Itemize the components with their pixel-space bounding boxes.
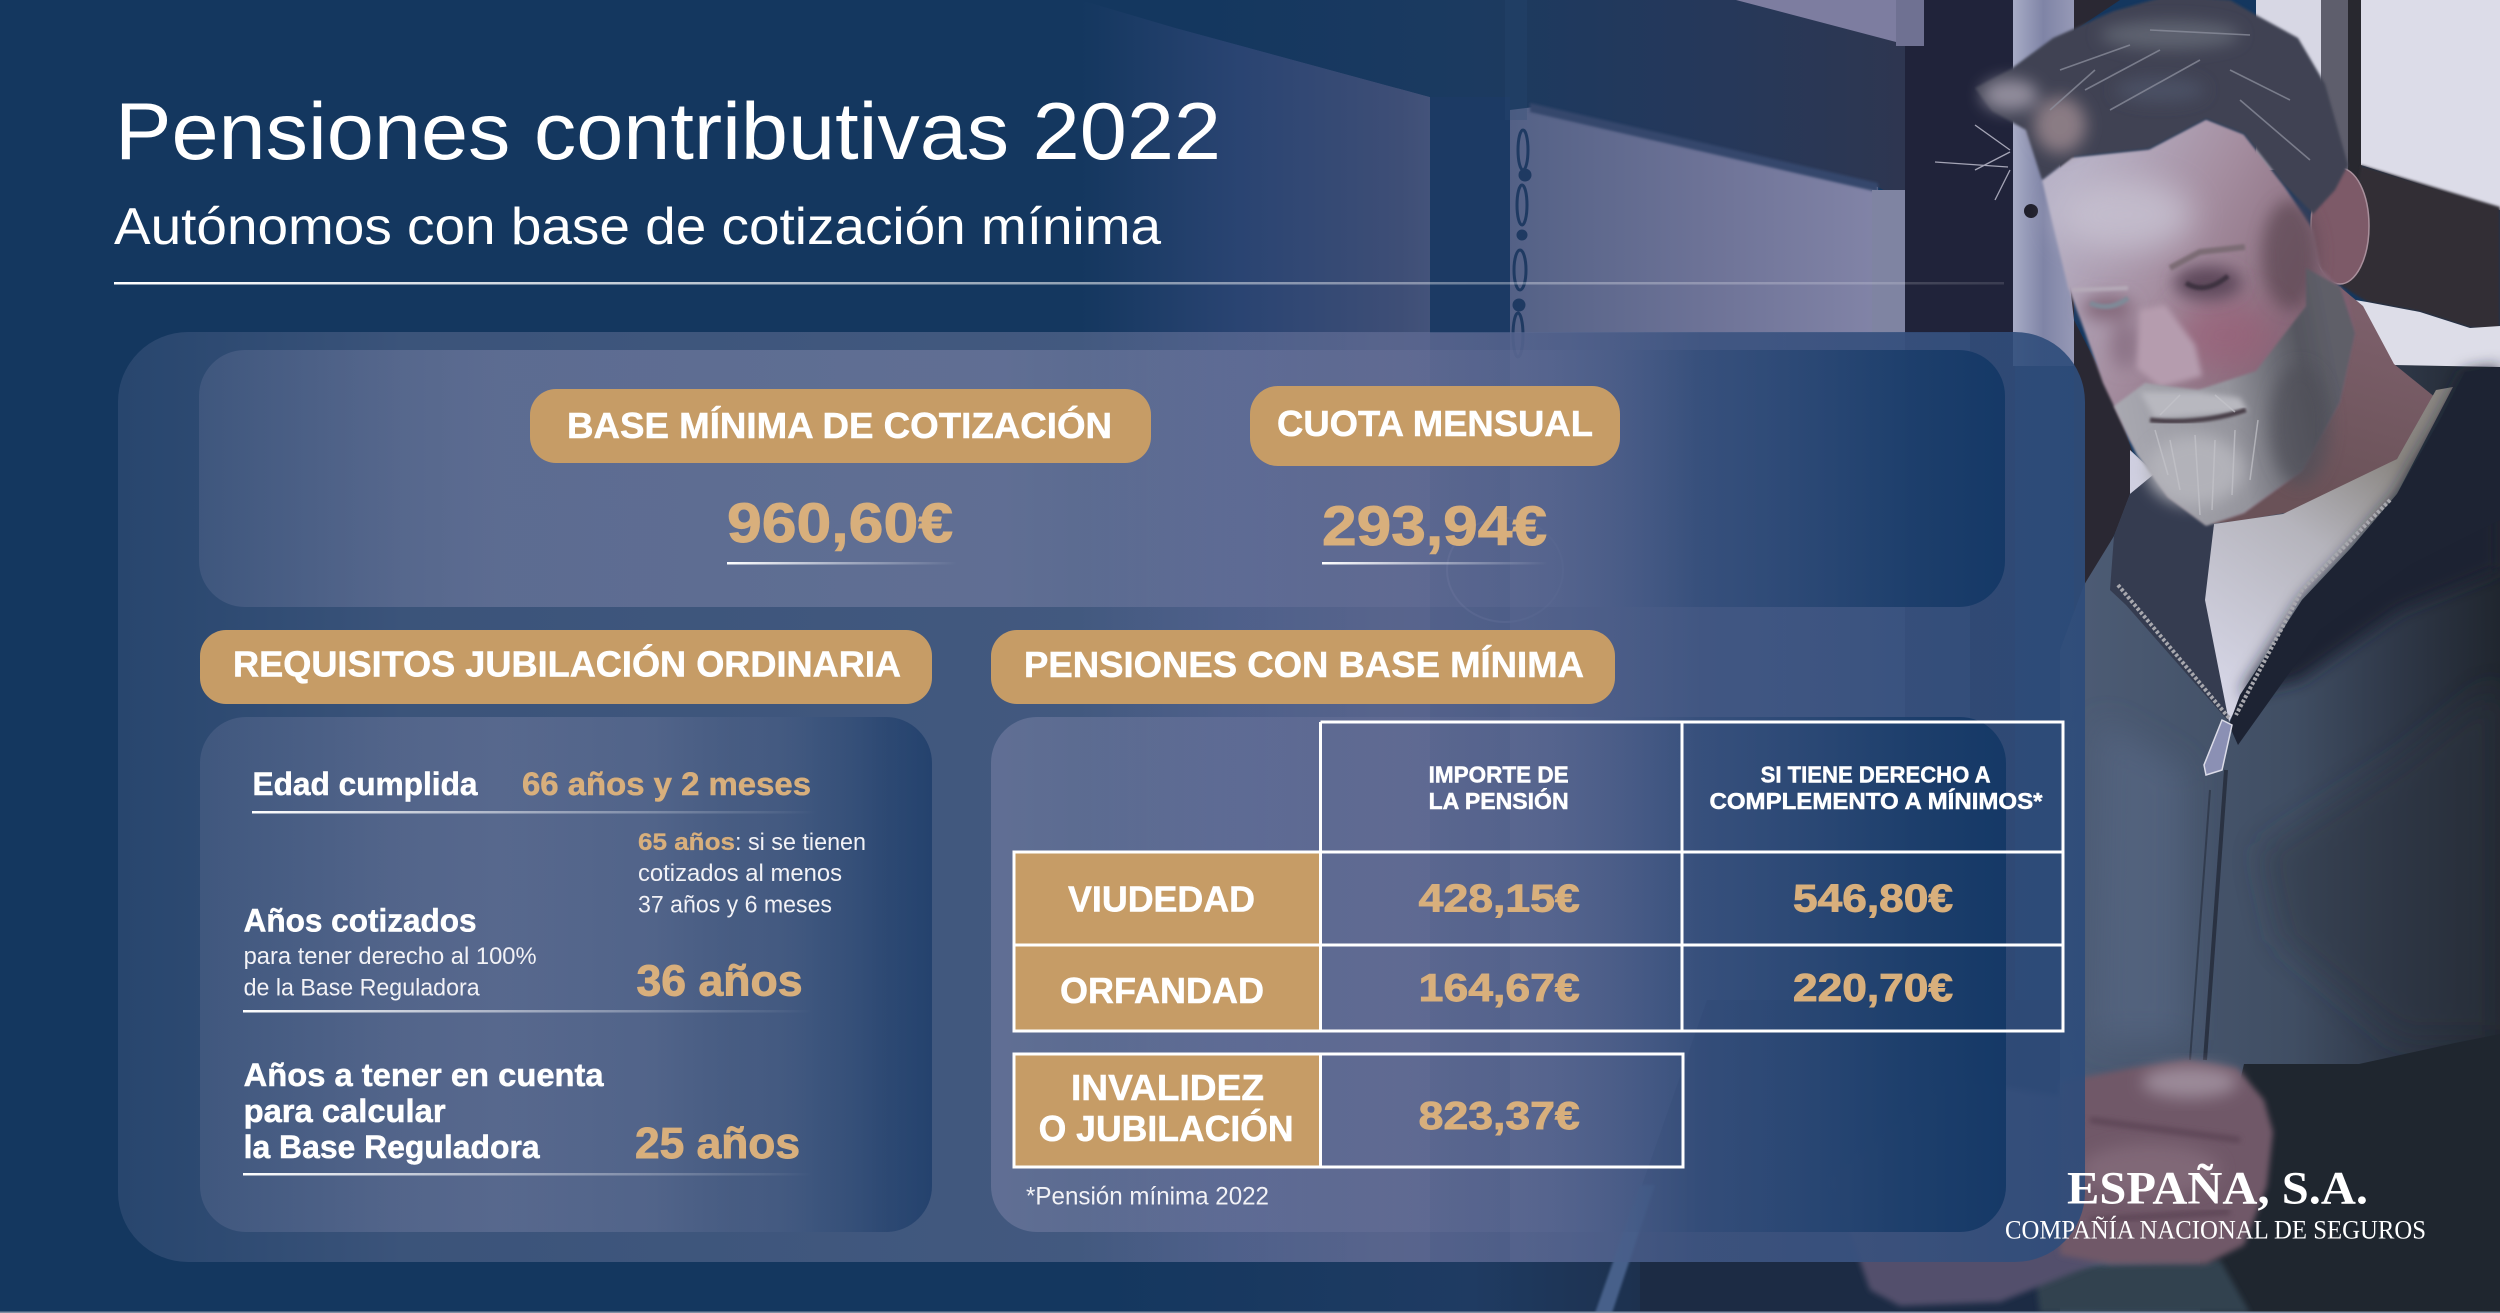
tablet corner: [2034, 1260, 2250, 1313]
chain: [1513, 0, 1530, 357]
footnote: *Pensión mínima 2022: [1026, 1183, 1269, 1211]
badge: cuota mensual: [1250, 386, 1620, 466]
ear: [2311, 168, 2369, 284]
light gap under beard: [2130, 450, 2160, 500]
hair: [1975, 0, 2348, 214]
zip pull: [2204, 720, 2232, 775]
bottom edge line: [0, 1312, 2500, 1313]
value: cuota mensual: 293,94€: [1322, 494, 1547, 557]
subtitle: Autónomos con base de cotización mínima: [114, 198, 1161, 256]
dark lower room: [1597, 1000, 2100, 1313]
forehead highlight: [2057, 179, 2193, 251]
row: años base reguladora: Años a tener en cuenta: [244, 1057, 604, 1093]
panel: base and monthly fee: [199, 350, 2005, 607]
cheek flush: [2175, 299, 2275, 371]
moustache: [2140, 392, 2248, 418]
badge: requisitos jubilación: [200, 630, 932, 704]
column headers: IMPORTE DE: [1429, 762, 1569, 788]
hair strands: [2050, 30, 2310, 160]
badge: base mínima: BASE MÍNIMA DE COTIZACIÓN: [567, 404, 1112, 446]
hand: [2060, 1060, 2273, 1264]
row: invalidez o jubilación: [1039, 1067, 1580, 1149]
table grid: [1014, 722, 2063, 1167]
nose: [2137, 305, 2202, 387]
hair wisps: [1935, 125, 2010, 200]
hoodie seam: [2190, 770, 2226, 1060]
chin highlight: [2147, 435, 2243, 505]
upper window beam: [1170, 0, 1960, 230]
sleeve: [2200, 1034, 2500, 1313]
second window pane: [1510, 107, 1878, 1262]
row: años base reguladora: [243, 1057, 813, 1176]
outer panel: [118, 332, 2085, 1262]
badge: base mínima: [530, 389, 1151, 463]
dark area behind head: [2060, 0, 2135, 620]
title rule: [114, 282, 2004, 284]
table: [1014, 722, 2063, 1167]
behind-panel smoothing tone: [1330, 333, 1970, 1262]
title: Pensiones contributivas 2022: [115, 87, 1221, 177]
row: orfandad: 164,67€: [1419, 967, 1580, 1010]
hoodie right lapel: [2229, 367, 2500, 745]
hair highlights: [1982, 21, 2240, 153]
column headers: LA PENSIÓN: [1429, 787, 1569, 814]
eyes: [2072, 247, 2245, 307]
head: face: [2042, 119, 2355, 524]
inner top panel background: [199, 350, 2005, 607]
row: invalidez o jubilación: INVALIDEZ: [1071, 1067, 1264, 1108]
window left pane: [1080, 0, 1430, 1262]
row: años base reguladora: para calcular: [244, 1093, 446, 1129]
row: años cotizados: para tener derecho al 100%: [244, 943, 537, 970]
row: viudedad: 546,80€: [1793, 878, 1953, 921]
top pane frame: [1896, 0, 1924, 46]
badge: pensiones con base mínima: PENSIONES CON BASE MÍNIMA: [1024, 644, 1584, 685]
row: edad cumplida: 66 años y 2 meses: [522, 766, 811, 802]
row: viudedad: 428,15€: [1419, 878, 1580, 921]
row: invalidez o jubilación: 823,37€: [1419, 1095, 1580, 1138]
row: orfandad: ORFANDAD: [1060, 970, 1264, 1011]
shirt: [2202, 387, 2453, 722]
eye shadows: [2082, 266, 2242, 369]
value: base mínima: 960,60€: [727, 491, 953, 554]
row: años cotizados: de la Base Reguladora: [244, 975, 480, 1002]
laptop edge: [1595, 1185, 1655, 1313]
beard strands: [2155, 395, 2258, 515]
row: invalidez o jubilación: O JUBILACIÓN: [1039, 1107, 1294, 1149]
note: 65 años: 65 años: [638, 829, 735, 856]
logo: España, S.A.: COMPAÑÍA NACIONAL DE SEGUROS: [2005, 1216, 2426, 1245]
beard dark side: [2270, 365, 2330, 485]
panel: requisitos: [200, 717, 932, 1232]
logo: España, S.A.: ESPAÑA, S.A.: [2067, 1163, 2368, 1215]
dark bottom under hand: [1640, 1262, 2110, 1313]
badge: pensiones con base mínima: [991, 630, 1615, 704]
badge: requisitos jubilación: REQUISITOS JUBILACIÓN ORDINARIA: [233, 642, 901, 684]
hoodie right lapel soft edge: [2240, 367, 2500, 695]
hoodie body: [2060, 365, 2500, 1313]
note: 65 años: : si se tienen: [735, 829, 866, 856]
logo: España, S.A.: [2005, 1163, 2426, 1245]
zipper: [2118, 500, 2390, 718]
faint hanging ring: [1447, 518, 1563, 622]
frame screw: [2024, 204, 2038, 218]
neck: [2210, 287, 2436, 524]
row: orfandad: [1060, 967, 1953, 1011]
background photo: man at window: [1080, 0, 2500, 1313]
panel: pensiones: [991, 717, 2063, 1232]
right window panes: [2256, 0, 2500, 375]
column headers: COMPLEMENTO A MÍNIMOS*: [1710, 787, 2043, 814]
row: años cotizados: [243, 902, 813, 1012]
row: años base reguladora: 25 años: [635, 1119, 800, 1168]
note: 65 años: cotizados al menos: [638, 860, 842, 887]
temple shade: [2262, 200, 2318, 310]
row: años base reguladora: la Base Reguladora: [244, 1129, 540, 1165]
light strip on pane edge: [1872, 190, 1912, 1262]
badge: cuota mensual: CUOTA MENSUAL: [1277, 403, 1593, 444]
row: orfandad: 220,70€: [1793, 967, 1953, 1010]
row: viudedad: [1068, 878, 1953, 921]
beam lower edge: [1530, 103, 1878, 192]
white window frame strip: [2013, 0, 2074, 366]
row: edad cumplida: [252, 766, 817, 814]
beard: [2114, 268, 2355, 526]
row: viudedad: VIUDEDAD: [1068, 879, 1255, 920]
mouth: [2150, 410, 2246, 421]
vertical window frame: [1430, 97, 1510, 1262]
column headers: [1429, 762, 2043, 814]
gold row cells: [1014, 852, 1320, 1167]
hoodie left lapel: [2110, 475, 2229, 722]
note: 65 años: 37 años y 6 meses: [638, 892, 832, 918]
hand under panel: [1830, 1080, 2100, 1306]
column headers: SI TIENE DERECHO A: [1761, 762, 1991, 788]
note: 65 años: [638, 829, 866, 918]
hoodie shading folds: [2095, 680, 2500, 1040]
row: años cotizados: Años cotizados: [244, 902, 477, 938]
dark frame: [1905, 0, 2015, 1262]
top pane fragment: [1736, 0, 1896, 42]
row: años cotizados: 36 años: [636, 957, 802, 1006]
row: edad cumplida: Edad cumplida: [252, 766, 478, 802]
bottom table zone: [1080, 1262, 2110, 1313]
